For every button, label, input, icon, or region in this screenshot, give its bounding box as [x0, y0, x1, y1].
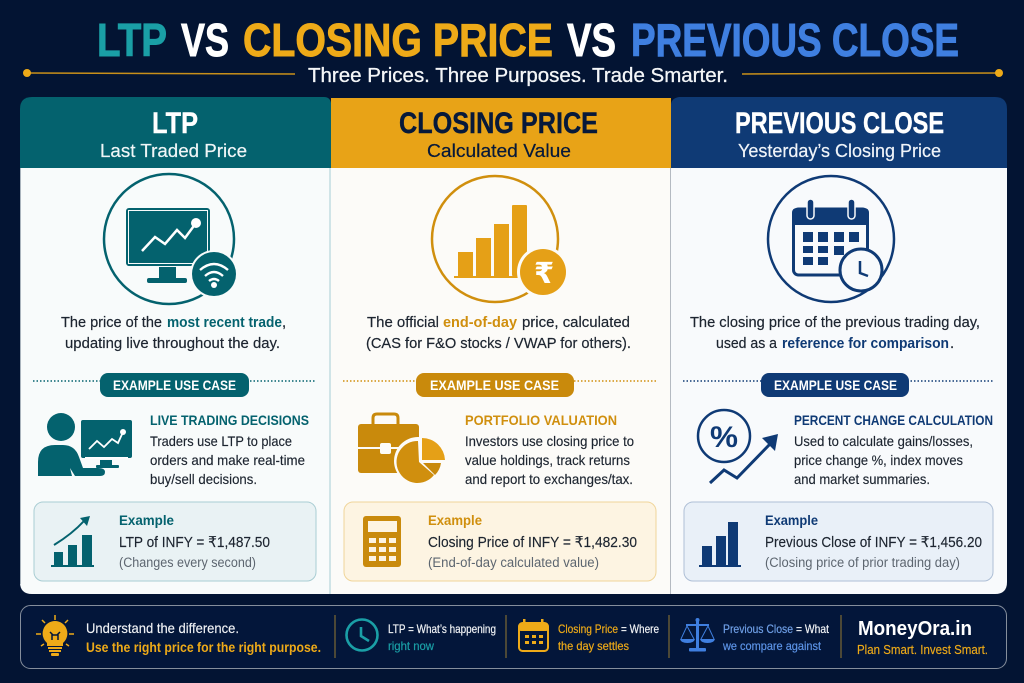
icon: calendar	[519, 619, 548, 651]
icon: clock	[346, 620, 378, 650]
icon: light bulb	[36, 615, 74, 656]
example use case badge	[343, 373, 656, 397]
footer bar	[20, 606, 1006, 668]
icon: monitor with live chart and wifi	[104, 174, 238, 304]
Previous Close description: The closing price of the previous trading day,	[690, 314, 980, 331]
Previous Close summary	[722, 622, 830, 653]
example box: Closing Price of INFY = ₹1,482.30	[428, 534, 637, 551]
title	[97, 14, 959, 66]
example use case badge: EXAMPLE USE CASE	[113, 377, 236, 393]
example use case badge	[33, 373, 316, 397]
brand: MoneyOra.in: MoneyOra.in	[858, 618, 972, 640]
example box: Example	[428, 512, 482, 528]
Previous Close description	[690, 314, 980, 352]
LTP header: Last Traded Price	[100, 141, 247, 161]
example box: LTP of INFY = ₹1,487.50	[119, 534, 270, 551]
icon: bars with rupee coin: ₹	[534, 258, 554, 290]
Previous Close header	[671, 97, 1007, 168]
Previous Close summary: = What	[796, 622, 830, 636]
Closing Price summary: the day settles	[558, 639, 629, 653]
example use case badge: EXAMPLE USE CASE	[430, 377, 559, 393]
title: VS	[567, 14, 616, 66]
icon: balance scales	[680, 618, 715, 652]
Closing Price description	[366, 314, 631, 352]
Previous Close summary: we compare against	[722, 639, 822, 653]
Previous Close description: reference for comparison	[782, 335, 949, 352]
use case text: orders and make real-time	[150, 452, 305, 468]
Closing Price header: Calculated Value	[427, 141, 571, 161]
LTP description: most recent trade	[167, 314, 282, 331]
panel: Closing Price	[331, 98, 671, 594]
icon: percent with rising arrow: %	[710, 421, 738, 454]
icon: calculator	[363, 516, 401, 567]
Previous Close description: used as a	[716, 335, 778, 352]
example box	[34, 502, 316, 581]
LTP summary: right now	[388, 639, 434, 653]
icon: rising bars with arrow	[51, 516, 94, 567]
icon: bar chart	[699, 522, 741, 567]
brand: MoneyOra.in	[857, 618, 988, 657]
LTP description: The price of the	[61, 314, 162, 331]
footer message: Understand the difference.	[86, 620, 239, 636]
use case text: and market summaries.	[794, 471, 930, 487]
icon: briefcase with pie chart	[358, 414, 445, 485]
use case text: and report to exchanges/tax.	[465, 471, 633, 487]
Closing Price summary: Closing Price	[558, 622, 618, 636]
use case text: Traders use LTP to place	[150, 433, 292, 449]
subtitle with side rules: Three Prices. Three Purposes. Trade Smarter.	[308, 65, 728, 87]
Closing Price description: The official	[367, 314, 439, 331]
LTP header: LTP	[152, 107, 198, 140]
Closing Price description: (CAS for F&O stocks / VWAP for others).	[366, 335, 631, 352]
brand: MoneyOra.in: Plan Smart. Invest Smart.	[857, 642, 988, 657]
Closing Price summary: = Where	[621, 622, 659, 636]
use case text: PERCENT CHANGE CALCULATION	[794, 412, 993, 428]
icon: percent with rising arrow	[698, 410, 778, 483]
LTP header	[20, 97, 331, 168]
example box	[684, 502, 993, 581]
LTP summary: LTP = What’s happening	[388, 622, 496, 636]
example use case badge: EXAMPLE USE CASE	[774, 377, 897, 393]
use case text: price change %, index moves	[794, 452, 963, 468]
LTP description: updating live throughout the day.	[65, 335, 280, 352]
use case text: LIVE TRADING DECISIONS	[150, 412, 309, 428]
example use case badge	[683, 373, 994, 397]
icon: bars with rupee coin	[432, 176, 569, 302]
Closing Price summary	[558, 622, 659, 653]
title: CLOSING PRICE	[243, 14, 553, 66]
use case text: PORTFOLIO VALUATION	[465, 412, 617, 428]
subtitle with side rules	[23, 65, 1003, 87]
footer message	[86, 620, 321, 655]
use case text: buy/sell decisions.	[150, 471, 257, 487]
Closing Price header	[331, 98, 671, 168]
Closing Price header: CLOSING PRICE	[399, 107, 598, 140]
Previous Close summary: Previous Close	[723, 622, 793, 636]
use case text	[150, 412, 309, 487]
LTP description: ,	[282, 314, 286, 331]
panel: LTP	[20, 97, 331, 594]
LTP description	[61, 314, 286, 352]
panel: Previous Close	[670, 97, 1007, 594]
title: LTP	[97, 14, 167, 66]
example box: Example	[765, 512, 818, 528]
Previous Close header: Yesterday’s Closing Price	[738, 141, 941, 161]
example box: (Changes every second)	[119, 555, 256, 570]
example box: Example	[119, 512, 174, 528]
Previous Close description: .	[950, 335, 954, 352]
use case text: Investors use closing price to	[465, 433, 634, 449]
use case text	[794, 412, 993, 487]
example box	[344, 502, 656, 581]
icon: calendar with clock	[768, 176, 894, 302]
example box: (Closing price of prior trading day)	[765, 555, 960, 570]
use case text: value holdings, track returns	[465, 452, 630, 468]
icon: trader at screen	[38, 413, 132, 476]
title: VS	[181, 14, 229, 66]
example box: (End-of-day calculated value)	[428, 555, 599, 570]
Closing Price description: price, calculated	[522, 314, 630, 331]
footer message: Use the right price for the right purpose.	[86, 639, 321, 655]
use case text: Used to calculate gains/losses,	[794, 433, 973, 449]
example box: Previous Close of INFY = ₹1,456.20	[765, 534, 982, 551]
use case text	[465, 412, 634, 487]
Previous Close header: PREVIOUS CLOSE	[735, 107, 944, 140]
Closing Price description: end-of-day	[443, 314, 518, 331]
LTP summary	[388, 622, 496, 653]
